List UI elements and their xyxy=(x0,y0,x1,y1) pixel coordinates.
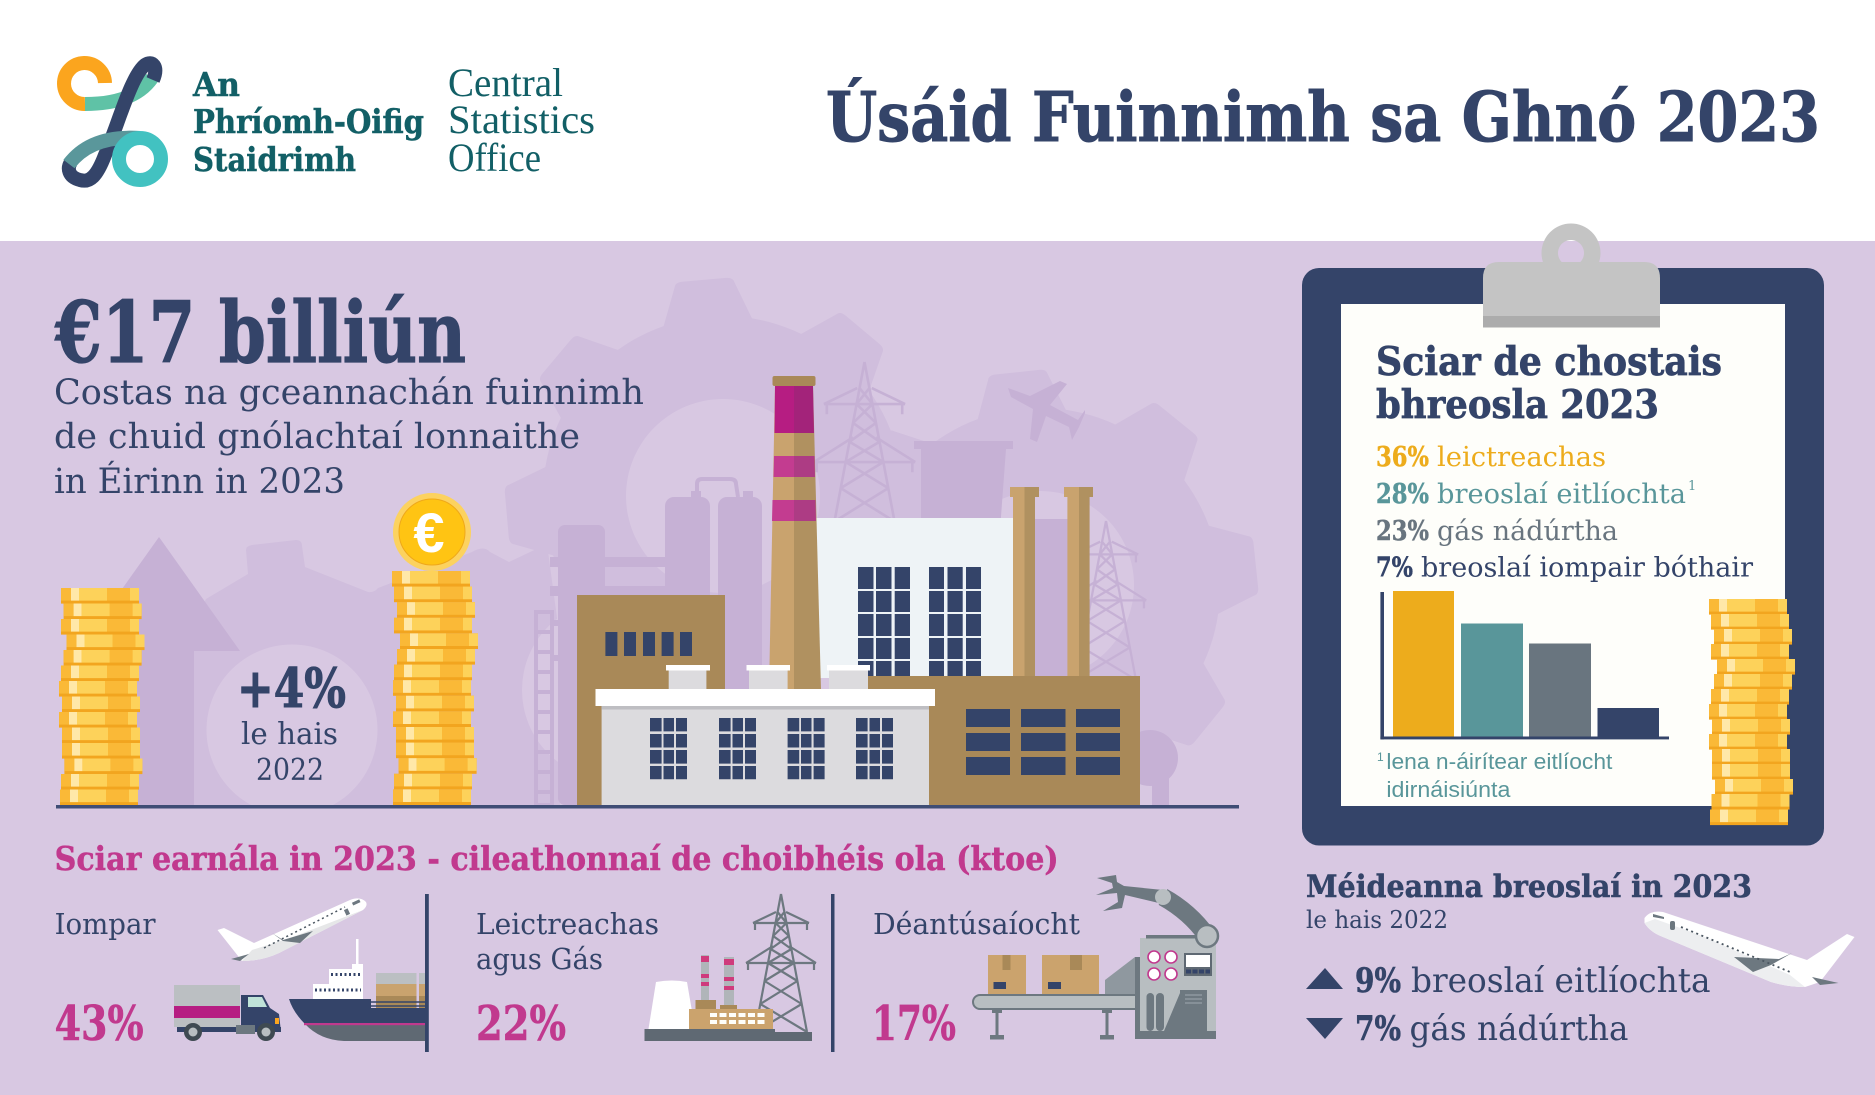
silhouette: block behind chimneys xyxy=(1030,519,1075,679)
label: Leictreachas agus Gás xyxy=(476,907,659,976)
ground line xyxy=(56,805,1239,808)
stat: aviation fuel up: 9% xyxy=(1355,961,1401,1001)
legend: fuel share list: breoslaí eitlíochta xyxy=(1437,479,1686,510)
icon: pylon xyxy=(746,894,816,1032)
purple main background xyxy=(0,241,1875,1095)
footnote xyxy=(1377,749,1612,802)
factory: white rear building xyxy=(816,518,1013,678)
icon: aeroplane xyxy=(1644,912,1854,987)
background gears and industrial silhouettes xyxy=(78,261,1278,826)
stat: natural gas down: 7% xyxy=(1355,1009,1401,1049)
callout: +4% le hais 2022: 2022 xyxy=(256,753,324,788)
legend: fuel share list: 36% xyxy=(1376,442,1429,473)
factory: striped main chimney xyxy=(769,376,821,690)
factory: right brown building xyxy=(867,676,1140,805)
silhouette: pylon right xyxy=(1066,521,1146,680)
icon: power station xyxy=(644,955,812,1041)
logo wordmark English: Central xyxy=(448,60,563,105)
callout: +4% le hais 2022: +4% xyxy=(237,656,346,720)
silhouette: tanks xyxy=(665,479,762,697)
clipboard heading: bhreosla 2023 xyxy=(1376,382,1659,428)
logo wordmark English xyxy=(448,60,595,180)
heading: sector share: Sciar earnála in 2023 - cileathonnaí de choibhéis ola (ktoe) xyxy=(55,839,1059,878)
logo: Central Statistics Office xyxy=(64,60,595,181)
logo wordmark Irish: An xyxy=(192,65,240,104)
label: Leictreachas agus Gás: Leictreachas xyxy=(476,907,659,941)
silhouette: spherical tank xyxy=(1122,730,1178,805)
icon: container ship xyxy=(289,939,425,1041)
footnote: 1 xyxy=(1377,750,1384,764)
icon: euro coin xyxy=(393,493,471,571)
panel: fuel volumes 2023 xyxy=(1306,869,1854,1049)
factory: front grey building with roof xyxy=(596,665,935,805)
clipboard clip xyxy=(1483,224,1660,328)
subheading: cost description: in Éirinn in 2023 xyxy=(54,460,345,502)
value: 22%: 22% xyxy=(476,996,566,1052)
stat: aviation fuel up: breoslaí eitlíochta xyxy=(1411,961,1710,1001)
background arrow xyxy=(78,537,240,805)
divider between energy and manufacturing xyxy=(831,894,834,1052)
arrow up xyxy=(1306,968,1343,989)
circle behind +4% xyxy=(206,644,378,805)
headline figure: €17 billiún: €17 billiún xyxy=(54,283,466,382)
subheading: cost description: Costas na gceannachán fuinnimh xyxy=(54,373,644,413)
logo mark xyxy=(64,63,161,181)
legend: fuel share list: breoslaí iompair bóthair xyxy=(1421,552,1753,584)
clipboard board xyxy=(1302,268,1824,846)
panel: manufacturing sector xyxy=(872,875,1218,1052)
gear: centre xyxy=(488,261,958,731)
legend: fuel share list: 28% xyxy=(1376,479,1429,510)
footnote: lena n-áirítear eitlíocht xyxy=(1386,749,1612,774)
value: 17%: 17% xyxy=(872,996,956,1052)
logo wordmark English: Office xyxy=(448,135,541,180)
icon: euro coin: € xyxy=(413,501,445,564)
coin stack: 2023 xyxy=(392,571,478,805)
silhouette: cooling tower xyxy=(914,441,1013,530)
white header band xyxy=(0,0,1875,241)
panel: clipboard with fuel cost shares xyxy=(1302,224,1824,846)
panel: electricity and gas sector xyxy=(476,894,816,1052)
logo wordmark Irish xyxy=(192,65,424,179)
subheading: cost description: de chuid gnólachtaí lonnaithe xyxy=(54,417,580,457)
panel: transport sector xyxy=(55,898,425,1052)
factory: twin small chimneys xyxy=(1010,487,1093,678)
gear holes xyxy=(626,399,820,593)
legend: fuel share list: leictreachas xyxy=(1437,442,1606,473)
label: Iompar: Iompar xyxy=(55,907,156,941)
label: Leictreachas agus Gás: agus Gás xyxy=(476,942,603,976)
legend: fuel share list: 23% xyxy=(1376,516,1429,547)
clipboard heading xyxy=(1376,339,1722,428)
footnote: idirnáisiúnta xyxy=(1386,777,1511,802)
factory illustration xyxy=(577,376,1140,805)
icon: lorry xyxy=(174,985,281,1041)
silhouette: plane xyxy=(1008,381,1085,442)
label: Déantúsaíocht: Déantúsaíocht xyxy=(873,907,1080,941)
bar chart: fuel shares xyxy=(1380,591,1669,739)
legend: fuel share list: 7% xyxy=(1376,552,1413,584)
subheading: le hais 2022: le hais 2022 xyxy=(1306,906,1448,934)
gear: right xyxy=(802,350,1278,826)
legend: fuel share list: gás nádúrtha xyxy=(1437,516,1618,547)
value: 43%: 43% xyxy=(55,996,144,1052)
heading: fuel volumes: Méideanna breoslaí in 2023 xyxy=(1306,869,1752,905)
icon: robotic machine xyxy=(1096,875,1218,1039)
arrow down xyxy=(1306,1018,1343,1039)
subheading: cost description xyxy=(54,373,644,502)
silhouette: process tower and pipes xyxy=(536,525,665,805)
coin stack on clipboard xyxy=(1709,599,1795,825)
icon: aeroplane xyxy=(218,898,367,961)
stat: natural gas down: gás nádúrtha xyxy=(1410,1009,1628,1049)
callout: +4% le hais 2022 xyxy=(237,656,346,788)
clipboard paper xyxy=(1341,304,1785,806)
callout: +4% le hais 2022: le hais xyxy=(241,717,338,752)
icon: conveyor belt with boxes xyxy=(973,955,1143,1040)
logo wordmark Irish: Phríomh-Oifig xyxy=(193,102,424,141)
legend: fuel share list: 1 xyxy=(1688,479,1696,494)
coin stack: 2022 xyxy=(59,588,144,805)
factory: left brown building xyxy=(577,595,725,805)
legend: fuel share list xyxy=(1376,442,1753,584)
divider between transport and energy xyxy=(425,894,429,1052)
logo wordmark English: Statistics xyxy=(448,97,595,142)
gear: lower left xyxy=(190,540,560,805)
logo wordmark Irish: Staidrimh xyxy=(193,140,356,179)
clipboard heading: Sciar de chostais xyxy=(1376,339,1722,385)
silhouette: pylon xyxy=(814,362,915,562)
